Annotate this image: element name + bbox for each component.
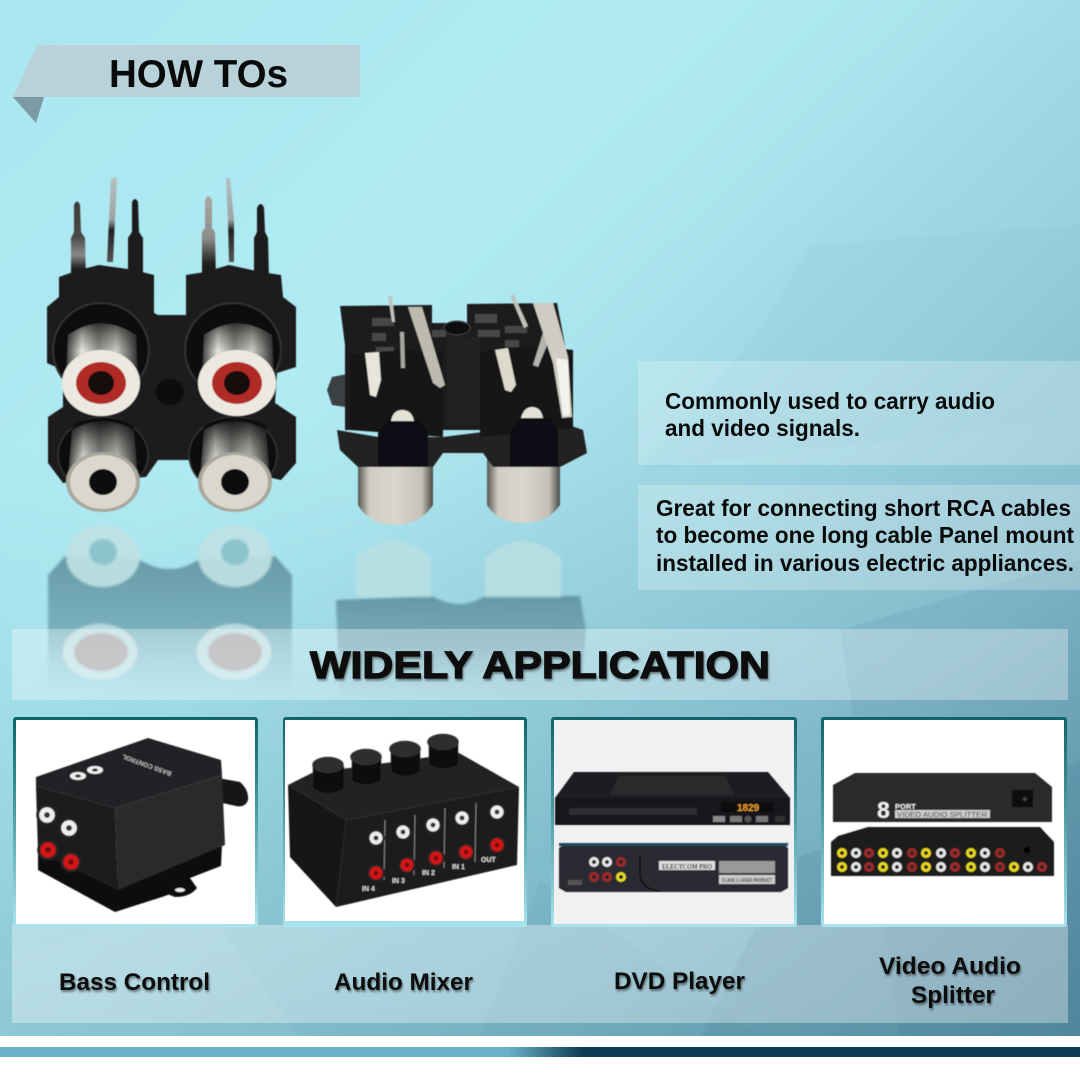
usage text: Commonly used to carry audio (665, 388, 995, 414)
port labels: OUT (481, 857, 496, 864)
towers (350, 351, 443, 437)
jacks (837, 848, 1047, 872)
port labels (362, 857, 496, 893)
card: DVD player (551, 717, 797, 927)
back panel (831, 827, 1054, 876)
caption: video audio splitter: Splitter (911, 982, 995, 1009)
center column (447, 337, 480, 425)
side lobe (327, 373, 352, 408)
metal terminals (408, 307, 445, 388)
cables text: to become one long cable Panel mount (656, 522, 1074, 548)
port labels: IN 2 (422, 870, 435, 877)
section band: widely application (12, 629, 1068, 700)
usage text: and video signals. (665, 415, 860, 441)
RCA connector: rear view (327, 295, 587, 525)
device: DVD player: 1829 (737, 803, 760, 814)
housing (47, 265, 296, 483)
card: bass control (13, 717, 258, 927)
section heading: WIDELY APPLICATION (310, 645, 770, 687)
cables text: installed in various electric appliances. (656, 550, 1074, 576)
port labels: IN 1 (452, 864, 465, 871)
knobs (312, 734, 458, 794)
divider lines (384, 803, 476, 880)
device: DVD player (555, 772, 790, 892)
plate (337, 423, 587, 467)
caption: DVD player: DVD Player (614, 968, 745, 995)
pins (71, 178, 269, 280)
RCA connector: front view (47, 178, 296, 512)
barrels (358, 455, 433, 525)
caption band (12, 925, 1068, 1023)
silver jack left (66, 418, 140, 512)
top label print (70, 752, 173, 780)
jacks (36, 804, 58, 826)
device: splitter: PORT (895, 802, 916, 811)
red jack right (198, 315, 276, 416)
RCA connector reflection (48, 525, 586, 700)
device: splitter (831, 773, 1054, 876)
description panel: usage (638, 361, 1080, 465)
heading ribbon: HOW TOs (13, 45, 360, 123)
caption: bass control: Bass Control (59, 969, 210, 996)
description panel: connecting cables (638, 485, 1080, 590)
reflected red jacks (63, 624, 137, 680)
device: DVD player: CLASS 1 LASER PRODUCT (722, 878, 772, 884)
caption: video audio splitter: Video Audio (879, 953, 1021, 980)
cables text: Great for connecting short RCA cables (656, 495, 1071, 521)
device: audio mixer box (288, 734, 519, 907)
silver jack right (198, 418, 272, 512)
square blocks (378, 420, 428, 467)
jacks (367, 829, 385, 847)
caption: audio mixer: Audio Mixer (334, 969, 473, 996)
upper housing (340, 303, 565, 430)
device: splitter: VIDEO AUDIO SPLITTER (897, 812, 987, 819)
device: bass control box (36, 738, 248, 912)
heading text: HOW TOs (109, 53, 288, 96)
red jack left (62, 315, 140, 416)
footer bar (0, 1036, 1080, 1080)
card: video audio splitter (821, 717, 1067, 927)
card: audio mixer (283, 717, 527, 927)
port labels: IN 4 (362, 886, 375, 893)
port labels: IN 3 (392, 878, 405, 885)
device: DVD player: ELECTCOM PRO (662, 863, 712, 871)
rear reflection (336, 596, 586, 700)
back panel (559, 843, 788, 892)
mounting hole (156, 379, 184, 405)
rib details (372, 314, 527, 353)
device: splitter: 8 (877, 797, 890, 823)
top label print: BASS CONTROL (121, 752, 173, 777)
